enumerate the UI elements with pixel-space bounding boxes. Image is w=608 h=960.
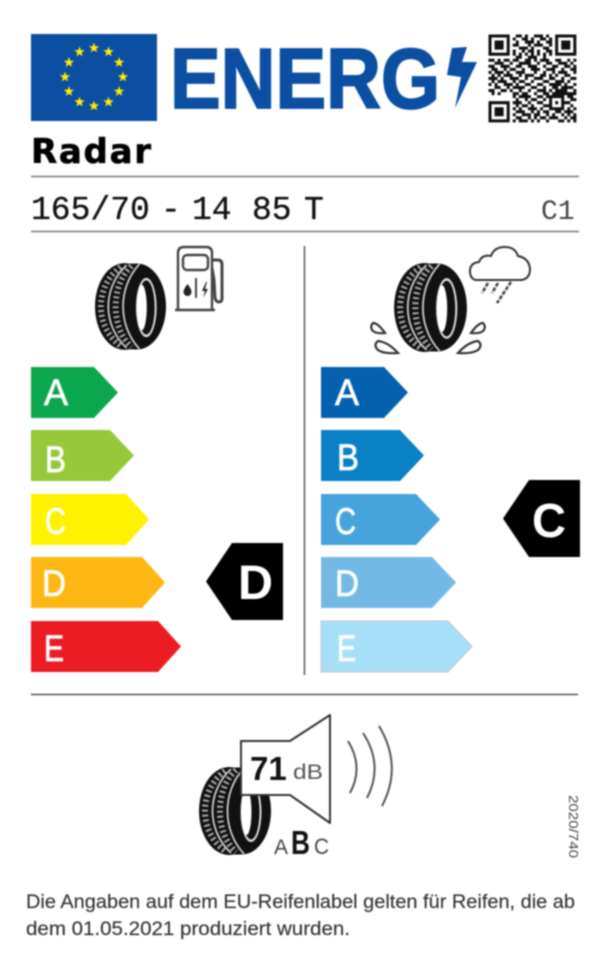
tyre size <box>31 192 324 229</box>
footer note: dem 01.05.2021 produziert wurden. <box>26 919 350 940</box>
tyre class: C1: C1 <box>541 197 575 228</box>
wet grip rating D <box>321 557 456 608</box>
tyre size: 165/70 <box>31 192 150 229</box>
fuel rating E: E <box>44 628 64 669</box>
fuel rating B <box>31 430 134 481</box>
tyre size: - <box>161 192 181 229</box>
regulation number: 2020/740 <box>566 795 580 858</box>
selected fuel rating D: D <box>238 557 273 610</box>
wet grip rating C: C <box>335 501 356 542</box>
noise class ABC: A <box>274 836 288 859</box>
tyre size: T <box>304 192 324 229</box>
icon: tyre with fuel pump <box>95 247 222 350</box>
icon: tyre with rain and spray <box>371 247 530 353</box>
wet grip rating A <box>321 367 408 418</box>
footer note: Die Angaben auf dem EU-Reifenlabel gelten für Reifen, die ab <box>26 892 575 913</box>
wet grip rating B: B <box>337 437 359 478</box>
wet grip rating D: D <box>335 563 359 604</box>
brand name: Radar: Radar <box>31 132 151 172</box>
selected fuel rating D <box>206 543 283 620</box>
selected wet grip rating C: C <box>532 495 566 548</box>
noise class ABC: C <box>314 834 329 859</box>
noise class ABC <box>274 824 329 861</box>
sound waves <box>348 726 392 806</box>
wet grip rating E <box>321 621 472 672</box>
fuel rating A: A <box>44 372 68 413</box>
fuel rating A <box>31 367 118 418</box>
title: ENERG: ENERG <box>170 32 440 127</box>
fuel rating C <box>31 494 149 545</box>
noise value: 71 <box>250 750 287 787</box>
tyre size: 14 <box>192 192 232 229</box>
fuel rating D: D <box>42 563 66 604</box>
QR code <box>488 36 576 121</box>
footer note <box>26 892 575 940</box>
EU flag <box>31 34 157 121</box>
wet grip rating A: A <box>335 372 359 413</box>
wet grip rating B <box>321 430 424 481</box>
wet grip rating C <box>321 494 440 545</box>
fuel rating D <box>31 557 165 608</box>
fuel rating E <box>31 621 181 672</box>
icon: speaker <box>241 715 330 823</box>
noise unit: dB <box>293 761 323 784</box>
noise panel <box>199 715 392 861</box>
wet grip rating E: E <box>337 628 356 669</box>
noise class ABC: B <box>291 824 310 861</box>
fuel rating C: C <box>45 501 66 542</box>
icon: lightning bolt <box>447 47 477 108</box>
tyre size: 85 <box>252 192 292 229</box>
fuel rating B: B <box>45 439 66 480</box>
icon: noise tyre <box>199 767 271 855</box>
selected wet grip rating C <box>503 480 580 557</box>
